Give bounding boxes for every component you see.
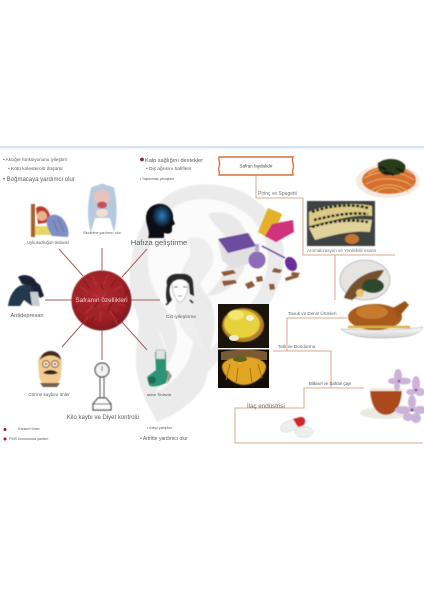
image: spaghetti plate	[356, 159, 420, 198]
icon: depressed figure	[8, 275, 44, 306]
text block: top right list: Kalp sağlığını destekler	[145, 158, 203, 164]
label: poultry and seafood: Tavuk ve Deniz Ürünleri	[288, 310, 337, 316]
text block: bottom left list: PMS konusunda yardım	[9, 437, 48, 441]
panel: saffron properties	[45, 248, 160, 360]
label: vision: Görme kaybını önler	[28, 392, 70, 397]
panel: saffron uses	[218, 157, 424, 443]
label: herbal tea: Bitkisel ve Safran çayı	[309, 381, 351, 386]
watermark swirl	[130, 184, 284, 422]
text block: top left list: • Kötü kolesterolü düşürür	[8, 166, 63, 172]
label: asthma: astım Tedavisi	[147, 392, 171, 397]
label: dessert and ice cream: Tatlı ve Dondurma	[278, 344, 316, 349]
label: memory: Hafıza geliştirme	[131, 238, 187, 247]
icon: woman face	[166, 274, 194, 305]
text block: bottom right list: • Artritte yardımcı olur	[140, 436, 188, 442]
text block: bottom left list: Kanseri önler	[18, 427, 40, 431]
label: antidepressant: Antidepresan	[11, 313, 43, 319]
text block: top right list: • Diş ağrısını hafifletir	[146, 166, 192, 172]
label: aromatization: Aromatizasyon ve Yenilebilir esans	[307, 248, 377, 253]
label: weight loss: Kilo kaybı ve Diyet kontrolü	[67, 415, 139, 421]
icon: man with glasses	[38, 351, 62, 387]
saffron ball	[72, 270, 132, 330]
icon: weight scale	[93, 363, 111, 410]
flow connector lines	[235, 175, 423, 443]
text block: bottom right list: • Ateşi yatıştırır	[147, 426, 173, 430]
heading box: saffron is beneficial: Safran faydalıdır	[239, 164, 273, 168]
image: saffron ice cream and dessert	[218, 304, 269, 388]
text block: top right list: • Yaşlanmayı yavaşlatır	[140, 177, 175, 181]
label: rice and spaghetti: Pirinç ve Spagetti	[258, 191, 297, 197]
image: fish plate	[340, 260, 390, 300]
label: insomnia: Uykusuzluğun tedavisi	[27, 240, 69, 245]
heading: saffron properties: Safranın özellikleri	[75, 297, 128, 304]
label: digestion: Sindirime yardımcı olur	[83, 231, 122, 235]
icon: pills	[281, 417, 313, 438]
icon: green inhaler	[147, 350, 172, 386]
top band	[0, 146, 424, 148]
text block: top left list: • Akciğer fonksiyonunu iyileştirir	[3, 157, 68, 162]
image: saffron tea and flowers	[360, 369, 424, 423]
image: saffron rice dish	[307, 201, 375, 246]
label: pharmaceutical industry: İlaç endüstrisi	[247, 403, 285, 410]
connector lines	[45, 248, 160, 360]
label: skin: Cilt iyileştirme	[166, 314, 196, 320]
text block: bottom right list	[140, 426, 188, 442]
text block: top left list: • Boğmacaya yardımcı olur	[3, 177, 75, 183]
heading box: saffron is beneficial	[219, 157, 294, 175]
image: perfume and gift box	[218, 208, 300, 290]
image: roast chicken	[341, 301, 423, 338]
icon: insomnia bed	[31, 204, 69, 237]
icon: head with brain	[146, 204, 175, 238]
text block: top right list	[140, 158, 203, 181]
icon: digestion torso	[88, 184, 117, 232]
text block: top left list	[3, 157, 75, 183]
text block: bottom left list	[4, 427, 48, 441]
